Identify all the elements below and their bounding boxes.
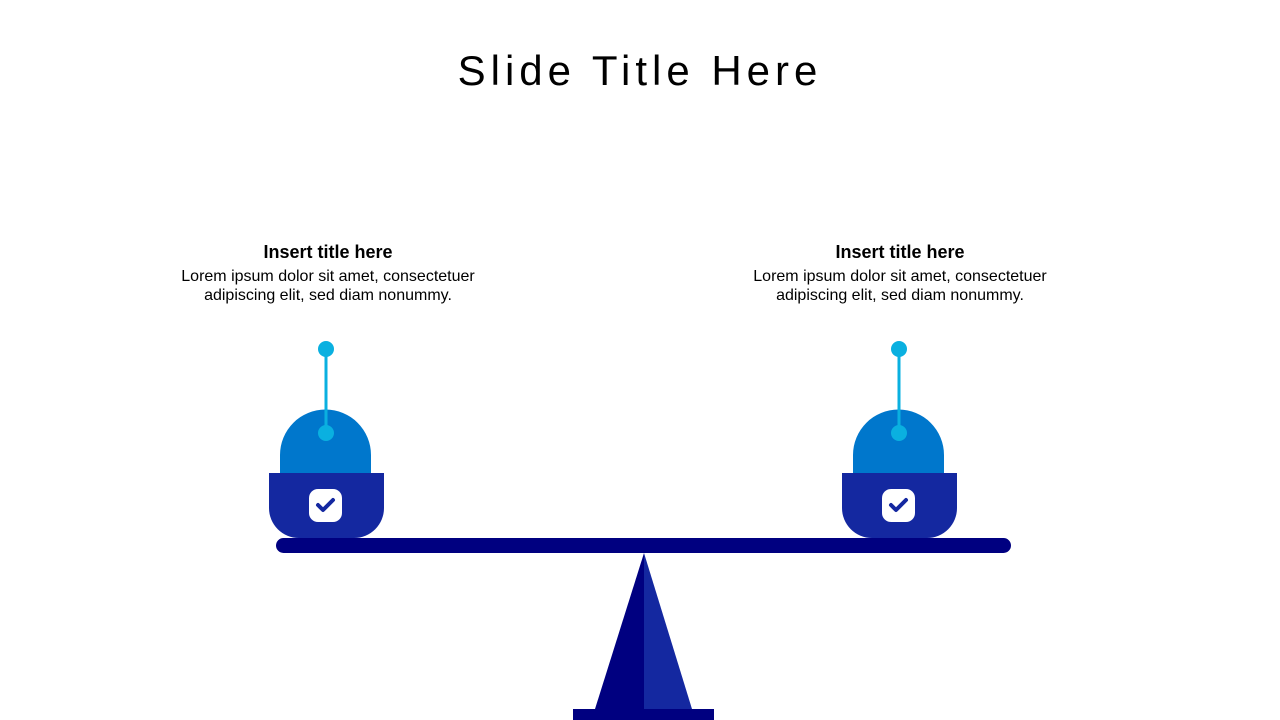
text block: right [753, 242, 1047, 304]
fulcrum [573, 553, 714, 720]
beam [276, 538, 1011, 553]
icon: left weight [269, 341, 384, 538]
text block: left: Insert title here [263, 242, 393, 262]
text block: right: adipiscing elit, sed diam nonummy. [776, 287, 1024, 304]
text block: left [181, 242, 475, 304]
title: Slide Title Here [458, 47, 822, 94]
icon: right weight [842, 341, 957, 538]
text block: left: Lorem ipsum dolor sit amet, consectetuer [181, 268, 475, 285]
text block: right: Lorem ipsum dolor sit amet, consectetuer [753, 268, 1047, 285]
text block: left: adipiscing elit, sed diam nonummy. [204, 287, 452, 304]
text block: right: Insert title here [835, 242, 965, 262]
